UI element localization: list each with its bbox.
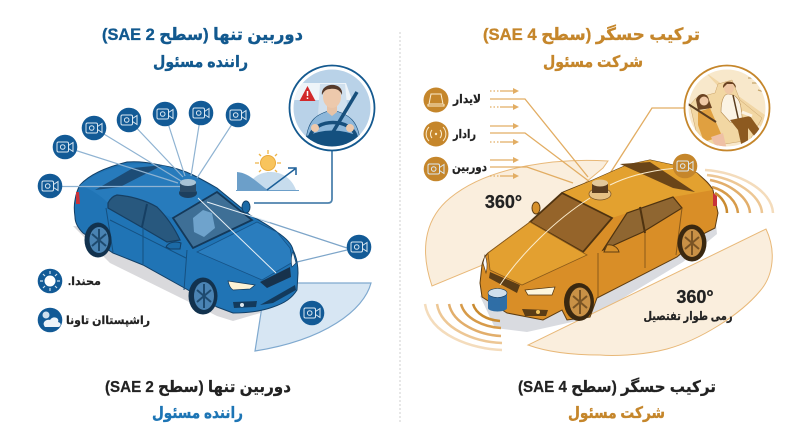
lidar label: لایدار	[452, 92, 481, 106]
right car rear wheel	[678, 224, 706, 262]
label: daytime: محندا.	[68, 276, 101, 288]
left car beacon sensor	[179, 179, 197, 198]
center divider	[399, 32, 401, 422]
right car	[480, 160, 718, 321]
camera icons, left panel	[38, 101, 371, 325]
left car side windows	[108, 195, 180, 242]
label: 360 lower: 360°	[676, 287, 714, 307]
left car fog lamp bar	[233, 301, 257, 308]
label: 360 upper: 360°	[485, 192, 522, 212]
left car windshield	[173, 192, 252, 248]
left car front wheel	[188, 278, 218, 314]
left car internal lines	[198, 198, 276, 273]
right car roof	[562, 160, 713, 218]
right car side headlight	[483, 255, 487, 273]
left car far mirror	[242, 201, 250, 213]
rear camera icon	[673, 154, 697, 178]
left car roof	[80, 164, 217, 218]
radar label: رادار	[452, 127, 476, 141]
front lidar unit	[488, 288, 507, 312]
lidar icon	[424, 88, 448, 112]
left car window pillar	[142, 204, 147, 227]
right car front wheel	[564, 283, 594, 321]
right car rear window	[620, 162, 695, 192]
right car window pillar	[640, 207, 645, 233]
icon: driver circle	[290, 66, 374, 150]
left car near mirror	[166, 242, 181, 249]
right car side windows	[603, 197, 682, 250]
right car far mirror	[532, 202, 540, 214]
rear sonar arcs	[705, 170, 773, 213]
caption: camera only: دوربین تنها (سطح SAE 2)	[105, 379, 291, 396]
caption: company responsible: شرکت مسئول	[568, 405, 665, 422]
right car hood	[488, 222, 587, 285]
left car headlight	[228, 281, 255, 290]
connector from driver to car	[254, 151, 332, 203]
radar icon	[424, 122, 448, 146]
right car fog lamp	[536, 310, 540, 314]
right car near mirror	[604, 245, 619, 252]
left car rear wheel	[84, 222, 112, 258]
camera label: دوربین	[452, 160, 487, 175]
left car body	[74, 162, 298, 313]
icon: passengers circle	[684, 66, 770, 150]
left car tail light	[76, 192, 80, 204]
icon: partly cloudy	[38, 308, 62, 332]
icon: sun and hill chart	[236, 150, 299, 190]
label: low visibility: راشپستاان تاونا	[66, 315, 150, 328]
caption: driver responsible: راننده مسئول	[152, 405, 243, 422]
title: sensor fusion: ترکیب حسگر (سطح SAE 4)	[483, 24, 700, 45]
left car seat figure	[193, 210, 215, 237]
left car fog lamp	[240, 303, 244, 307]
left car hood	[197, 222, 293, 280]
left camera fan lines	[50, 113, 238, 186]
right car grille	[489, 272, 520, 293]
camera icon	[424, 157, 448, 181]
left car door lines	[106, 208, 187, 290]
right car internal lines	[500, 168, 677, 285]
title: camera only: دوربین تنها (سطح SAE 2)	[102, 25, 303, 45]
left car	[74, 162, 298, 314]
right panel: upper-left coverage sector	[426, 160, 608, 286]
sensor arrows	[490, 91, 590, 183]
icon: daytime	[38, 269, 62, 293]
right car fog lamp bar	[522, 309, 548, 316]
caption: sensor fusion: ترکیب حسگر (سطح SAE 4)	[518, 377, 716, 396]
subtitle: driver responsible: راننده مسئول	[153, 54, 248, 71]
right car body	[480, 160, 718, 320]
passenger connector	[607, 108, 684, 178]
left car shadow	[73, 226, 300, 321]
front coverage cone	[255, 283, 371, 351]
right camera connection lines	[207, 202, 347, 262]
right car shadow	[480, 215, 717, 332]
lidar roof unit	[589, 180, 611, 200]
left car rear window	[95, 165, 163, 190]
label: long range: رمی طوار تفتصیل	[644, 309, 733, 324]
arrowheads	[513, 88, 519, 179]
right car headlight	[525, 287, 555, 295]
left car lower grille	[260, 285, 296, 305]
right car door lines	[598, 208, 682, 297]
subtitle: company responsible: شرکت مسئول	[543, 54, 643, 71]
front sonar arcs	[425, 304, 502, 350]
left car grille	[260, 267, 291, 288]
left car side headlight	[291, 252, 296, 267]
right car tail light	[713, 193, 717, 206]
lower-right coverage sector	[528, 229, 772, 355]
right car windshield	[530, 193, 612, 252]
